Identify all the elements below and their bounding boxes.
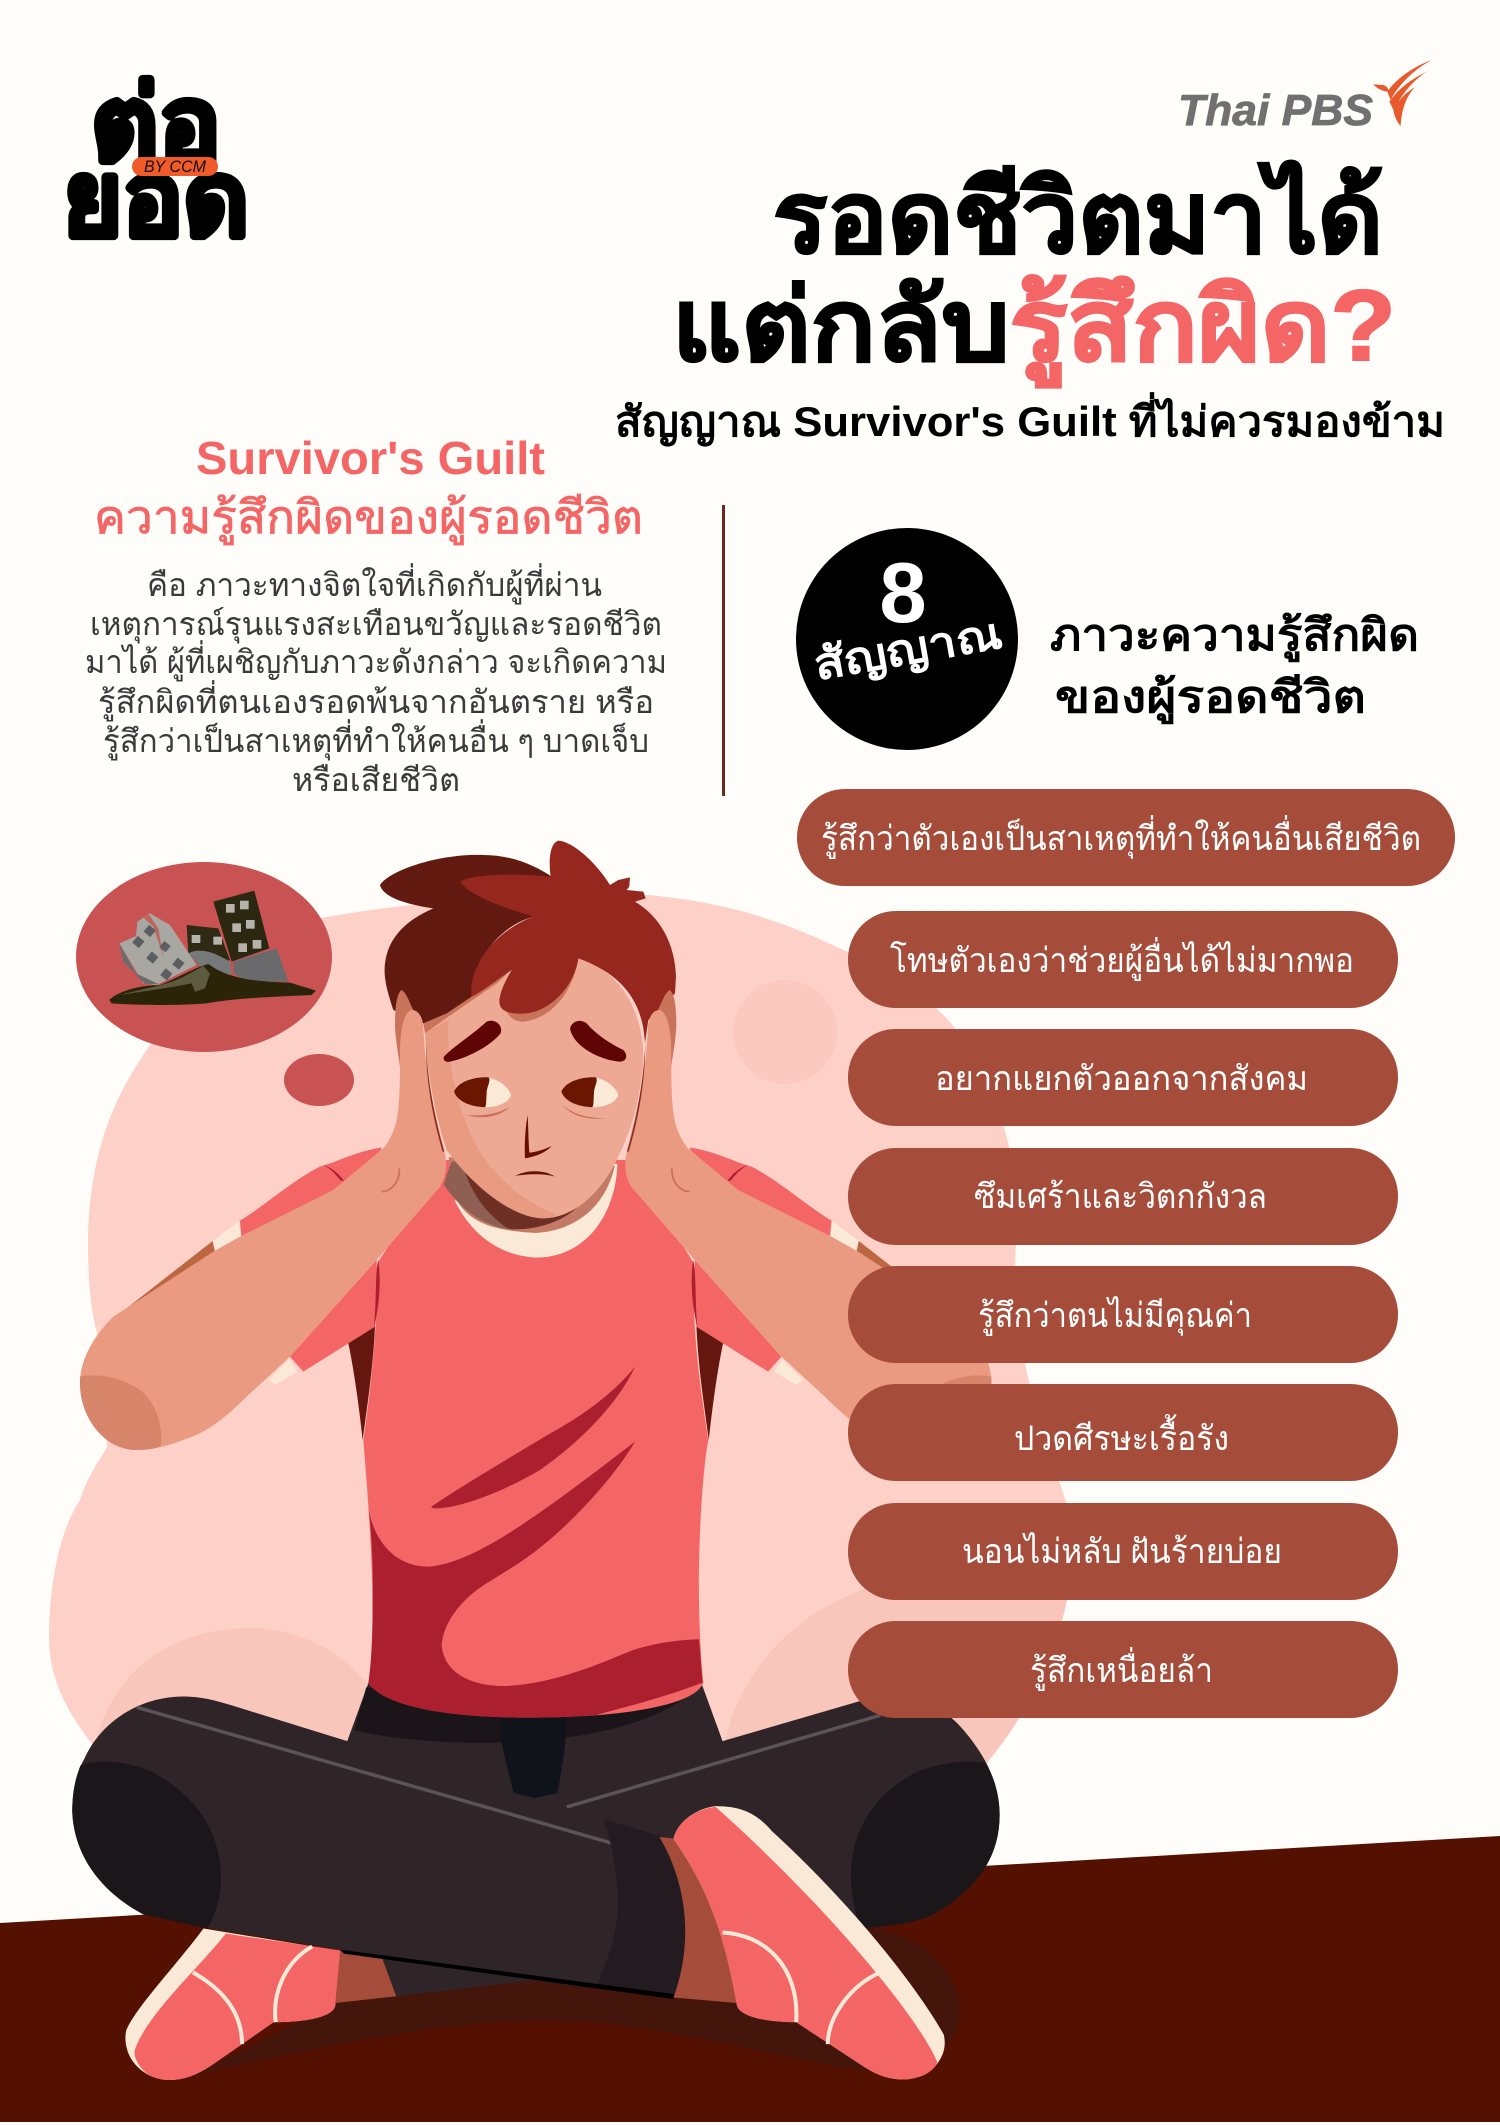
left cuff shading xyxy=(72,1761,221,1928)
hair dark xyxy=(380,855,553,1023)
logo top word: ต่อ xyxy=(91,67,221,183)
sign pill 6: ปวดศีรษะเรื้อรัง xyxy=(1014,1414,1229,1458)
right forearm xyxy=(631,1148,991,1450)
right sock xyxy=(659,1837,737,2003)
right torso shadow xyxy=(696,1327,723,1440)
floor shadow xyxy=(196,1928,959,2074)
sign pill 1 xyxy=(797,789,1455,886)
shirt fold lower xyxy=(368,1442,703,1718)
collar xyxy=(455,1164,617,1258)
badge word: สัญญาณ xyxy=(810,609,1006,691)
logo: ต่อ ยอด xyxy=(63,67,249,258)
bubble small xyxy=(284,1054,354,1106)
right upper cuff xyxy=(829,1221,859,1254)
signs heading xyxy=(1050,611,1419,724)
thought bubble xyxy=(76,862,354,1106)
head xyxy=(340,841,731,1220)
definition heading Thai: ความรู้สึกผิดของผู้รอดชีวิต xyxy=(94,491,643,545)
definition paragraph: คือ ภาวะทางจิตใจที่เกิดกับผู้ที่ผ่าน xyxy=(147,563,602,605)
title xyxy=(672,161,1396,388)
right arm xyxy=(631,1148,991,1450)
sign pill 7: นอนไม่หลับ ฝันร้ายบ่อย xyxy=(962,1532,1282,1571)
shirt body xyxy=(363,1298,708,1718)
left sleeve seam xyxy=(374,1260,380,1327)
feather icon xyxy=(1373,60,1432,126)
signs heading line 1: ภาวะความรู้สึกผิด xyxy=(1050,611,1419,662)
sign pill 4 xyxy=(848,1148,1398,1245)
sign pill 5: รู้สึกว่าตนไม่มีคุณค่า xyxy=(978,1296,1252,1336)
sign pill 6 xyxy=(848,1384,1398,1481)
left forearm xyxy=(80,1148,440,1450)
left elbow xyxy=(80,1375,161,1450)
under eye lines xyxy=(467,1105,607,1119)
title line 2: แต่กลับรู้สึกผิด? xyxy=(672,270,1396,388)
badge circle xyxy=(796,528,1018,750)
Thai PBS wordmark: Thai PBS xyxy=(1178,86,1373,135)
left arm xyxy=(80,1148,440,1450)
shirt shoulders xyxy=(375,1160,696,1305)
fly xyxy=(499,1717,567,1798)
bubble large xyxy=(76,862,332,1052)
neck dark xyxy=(462,1157,589,1229)
right sleeve stripe xyxy=(727,1164,749,1181)
sign pill 1: รู้สึกว่าตัวเองเป็นสาเหตุที่ทำให้คนอื่นเสียชีวิต xyxy=(821,815,1421,859)
leg edge xyxy=(340,1950,675,1999)
right upper sleeve xyxy=(690,1148,831,1240)
nose xyxy=(525,1115,552,1158)
left upper sleeve xyxy=(240,1148,382,1240)
logo badge xyxy=(132,157,218,176)
definition paragraph: หรือเสียชีวิต xyxy=(292,762,460,798)
right lower sleeve xyxy=(693,1260,781,1372)
shirt fold streak xyxy=(431,1367,635,1508)
definition paragraph: รู้สึกผิดที่ตนเองรอดพ้นจากอันตราย หรือ xyxy=(98,680,654,722)
mouth xyxy=(515,1171,555,1177)
neck shade xyxy=(443,1162,509,1229)
floor xyxy=(0,1836,1500,2122)
background blob xyxy=(49,894,1073,1765)
definition panel xyxy=(85,432,667,798)
hair red xyxy=(460,841,676,1043)
badge: 8 signs xyxy=(796,528,1018,750)
sign pill 2: โทษตัวเองว่าช่วยผู้อื่นได้ไม่มากพอ xyxy=(890,937,1354,981)
definition paragraph: เหตุการณ์รุนแรงสะเทือนขวัญและรอดชีวิต xyxy=(90,606,662,644)
face shadow xyxy=(425,1020,557,1218)
sign pill 3 xyxy=(848,1029,1398,1126)
logo badge text: BY CCM xyxy=(144,157,207,176)
left torso shadow xyxy=(348,1327,375,1440)
logo: Thai PBS xyxy=(1178,60,1432,135)
neck xyxy=(449,1157,615,1233)
sign pill 5 xyxy=(848,1266,1398,1363)
right cuff shading xyxy=(851,1762,1000,1928)
sign pill 8 xyxy=(848,1621,1398,1718)
definition heading English: Survivor's Guilt xyxy=(196,432,545,484)
right shoe xyxy=(673,1806,945,2080)
left upper cuff xyxy=(213,1221,242,1254)
definition paragraph: รู้สึกว่าเป็นสาเหตุที่ทำให้คนอื่น ๆ บาดเจ็บ xyxy=(103,719,649,761)
pants xyxy=(72,1683,1000,1998)
left arm shadow xyxy=(112,1241,215,1323)
left eye xyxy=(454,1077,511,1107)
signs heading line 2: ของผู้รอดชีวิต xyxy=(1055,673,1366,724)
sign pill 8: รู้สึกเหนื่อยล้า xyxy=(1030,1647,1213,1691)
badge number: 8 xyxy=(879,546,927,641)
blob mounds xyxy=(97,1589,1067,1763)
face xyxy=(425,958,643,1218)
left sock xyxy=(335,1950,396,2003)
knee shading xyxy=(596,1819,688,1997)
definition paragraph: มาได้ ผู้ที่เผชิญกับภาวะดังกล่าว จะเกิดความ xyxy=(85,640,667,682)
sign pill 3: อยากแยกตัวออกจากสังคม xyxy=(935,1060,1308,1098)
forehead shadow xyxy=(423,958,578,1033)
logo bottom word: ยอด xyxy=(63,142,249,258)
waist shadow xyxy=(354,1687,702,1743)
definition paragraph xyxy=(85,563,667,798)
sign pill 4: ซึมเศร้าและวิตกกังวล xyxy=(974,1178,1267,1216)
right sleeve seam xyxy=(692,1260,697,1327)
right lower cuff xyxy=(774,1359,803,1385)
right hand xyxy=(625,990,731,1220)
sign pill 7 xyxy=(848,1503,1398,1600)
blob spot xyxy=(733,980,837,1084)
right eye xyxy=(561,1077,618,1107)
left hand xyxy=(340,990,446,1220)
title line 1: รอดชีวิตมาได้ xyxy=(773,161,1383,274)
right elbow xyxy=(910,1375,991,1450)
eyebrows xyxy=(444,1021,626,1062)
right arm shadow xyxy=(856,1241,960,1323)
subtitle: สัญญาณ Survivor's Guilt ที่ไม่ควรมองข้าม xyxy=(615,392,1445,447)
figure: lower body xyxy=(72,1683,1000,2080)
trouser creases xyxy=(137,1707,880,1861)
figure: shirt xyxy=(363,1160,708,1718)
icon: collapsed buildings xyxy=(109,891,316,1005)
vertical divider xyxy=(722,505,725,796)
collar and neck xyxy=(443,1157,617,1258)
sign pill 2 xyxy=(848,911,1398,1008)
left sleeve stripe xyxy=(323,1164,344,1181)
left lower cuff xyxy=(268,1359,297,1385)
left shoe xyxy=(125,1928,340,2080)
left lower sleeve xyxy=(290,1260,378,1372)
